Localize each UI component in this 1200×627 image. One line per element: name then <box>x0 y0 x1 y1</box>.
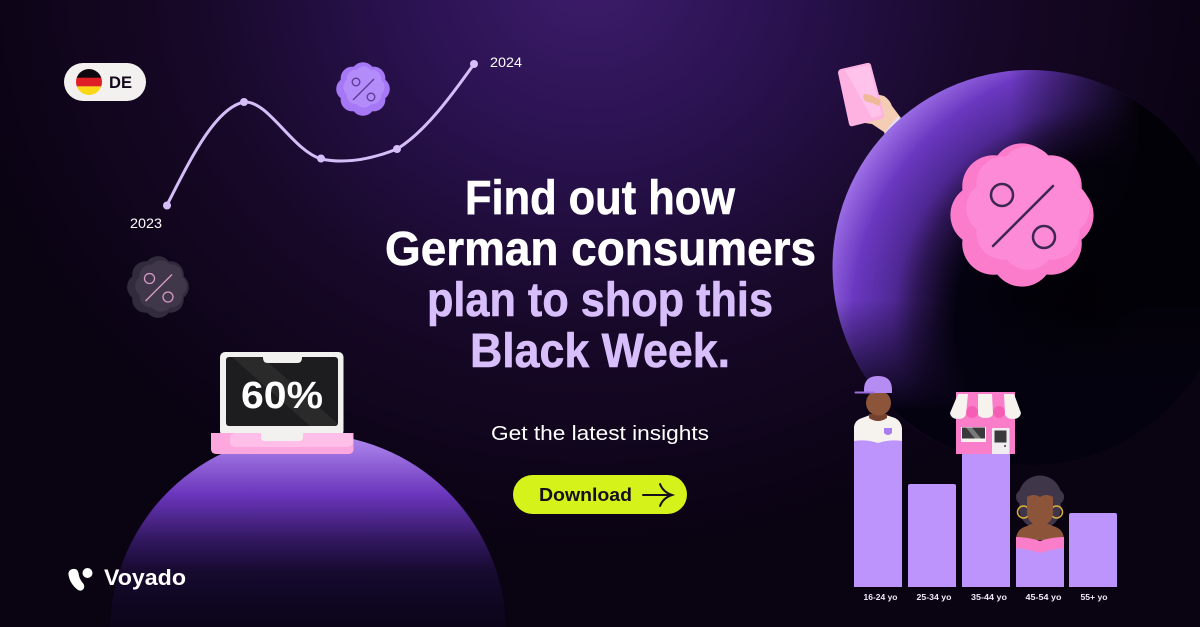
line chart: 2023 to 2024 <box>130 55 523 231</box>
bar chart: age groups: 45-54 yo <box>1026 592 1062 602</box>
bar chart: age groups <box>854 436 1117 602</box>
figure: storefront <box>950 392 1021 454</box>
icon: purple discount badge <box>336 62 390 116</box>
download button: Download <box>539 484 632 505</box>
subheading: Get the latest insights <box>491 423 709 445</box>
headline: Find out how <box>465 172 736 225</box>
headline: Black Week. <box>470 325 730 378</box>
line chart: 2023 to 2024: 2023 <box>130 216 162 231</box>
bar chart: age groups: 25-34 yo <box>916 592 952 602</box>
logo: Voyado <box>68 565 186 591</box>
laptop with 60%: 60% <box>241 375 323 417</box>
bar chart: age groups: 16-24 yo <box>864 592 898 602</box>
headline <box>385 172 816 378</box>
headline: German consumers <box>385 223 816 276</box>
logo: Voyado: Voyado <box>104 565 186 590</box>
icon: hand holding phone <box>838 63 902 138</box>
badge: Germany <box>64 63 146 101</box>
sphere: right <box>832 70 1200 465</box>
bar chart: age groups: 55+ yo <box>1080 592 1108 602</box>
badge: Germany: DE <box>109 73 132 92</box>
icon: large pink discount badge <box>950 143 1094 287</box>
bar chart: age groups: 35-44 yo <box>971 592 1007 602</box>
line chart: 2023 to 2024: 2024 <box>490 55 523 70</box>
sphere: bottom left <box>110 434 506 627</box>
icon: dark discount badge <box>127 256 189 318</box>
laptop with 60% <box>211 352 354 454</box>
figure: person with earrings <box>1016 476 1064 553</box>
icon: German flag <box>76 69 102 95</box>
download button <box>513 475 687 514</box>
figure: person with cap <box>854 376 902 443</box>
headline: plan to shop this <box>427 274 773 327</box>
icon: arrow <box>643 484 672 506</box>
